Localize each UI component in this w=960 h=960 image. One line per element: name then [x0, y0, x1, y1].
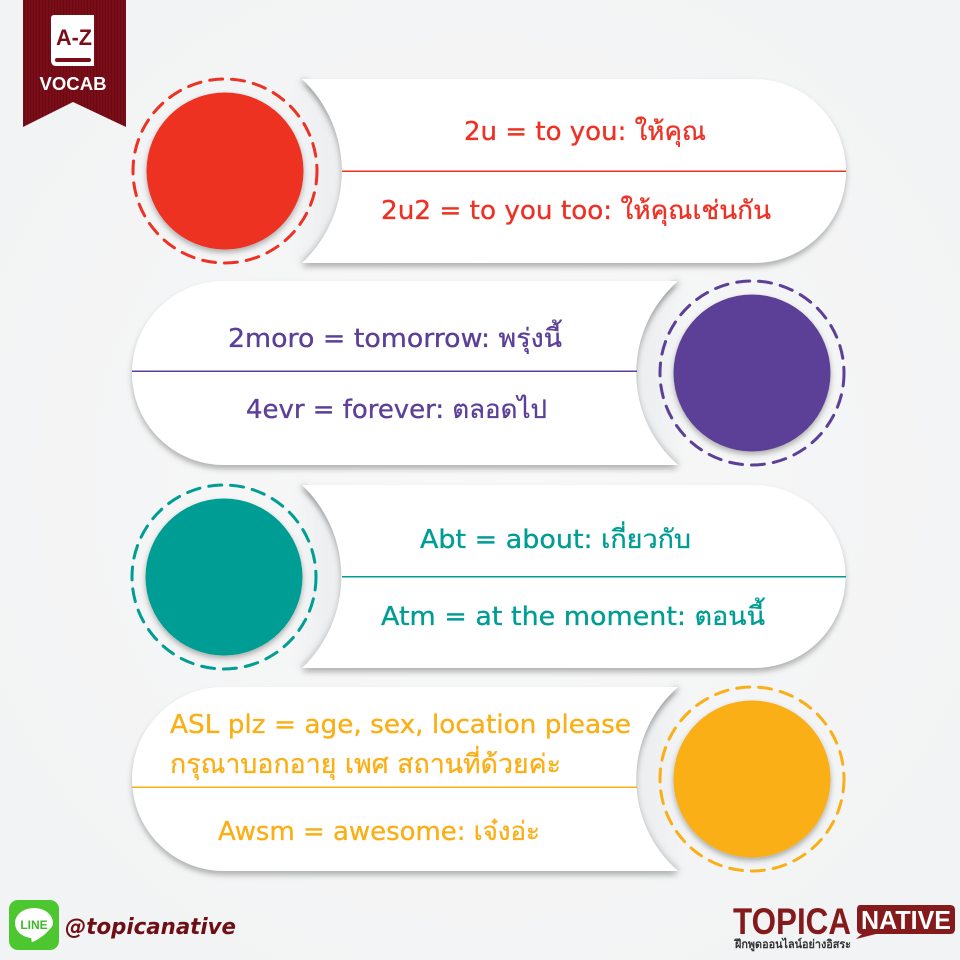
label: VOCAB: VOCAB	[40, 74, 106, 94]
logo: TOPICA NATIVE	[733, 901, 955, 952]
icon: teal circle	[132, 485, 316, 669]
text: 2moro: 2moro = tomorrow: พรุ่งนี้	[228, 319, 562, 354]
logo: TOPICA NATIVE: ฝึกพูดออนไลน์อย่างอิสระ	[734, 937, 851, 952]
text: Atm: Atm = at the moment: ตอนนี้	[381, 597, 765, 632]
panel: 2u	[133, 79, 846, 263]
text: line handle: @topicanative	[65, 915, 236, 940]
text: ASL: ASL plz = age, sex, location please	[170, 710, 631, 740]
icon: A-Z book: A-Z	[56, 25, 92, 50]
icon: yellow circle	[660, 687, 844, 871]
panel: 2moro	[132, 281, 844, 465]
icon: LINE: LINE	[20, 918, 48, 932]
text: 2u2: 2u2 = to you too: ให้คุณเช่นกัน	[381, 196, 771, 226]
icon: red circle	[133, 79, 317, 263]
text: Awsm: Awsm = awesome: เจ๋งอ่ะ	[218, 817, 540, 847]
text: 4evr: 4evr = forever: ตลอดไป	[246, 394, 547, 425]
ribbon: vocab badge	[23, 0, 126, 127]
text: ASL Thai: กรุณาบอกอายุ เพศ สถานที่ด้วยค่ะ	[170, 746, 561, 780]
icon: LINE	[9, 900, 59, 950]
icon: purple circle	[660, 281, 844, 465]
text: Abt: Abt = about: เกี่ยวกับ	[420, 521, 691, 555]
panel: ASL	[132, 687, 844, 871]
logo: TOPICA NATIVE: TOPICA	[733, 901, 851, 942]
text: 2u: 2u = to you: ให้คุณ	[464, 117, 706, 147]
panel: Abt	[132, 485, 846, 669]
logo: TOPICA NATIVE: NATIVE	[861, 905, 951, 935]
